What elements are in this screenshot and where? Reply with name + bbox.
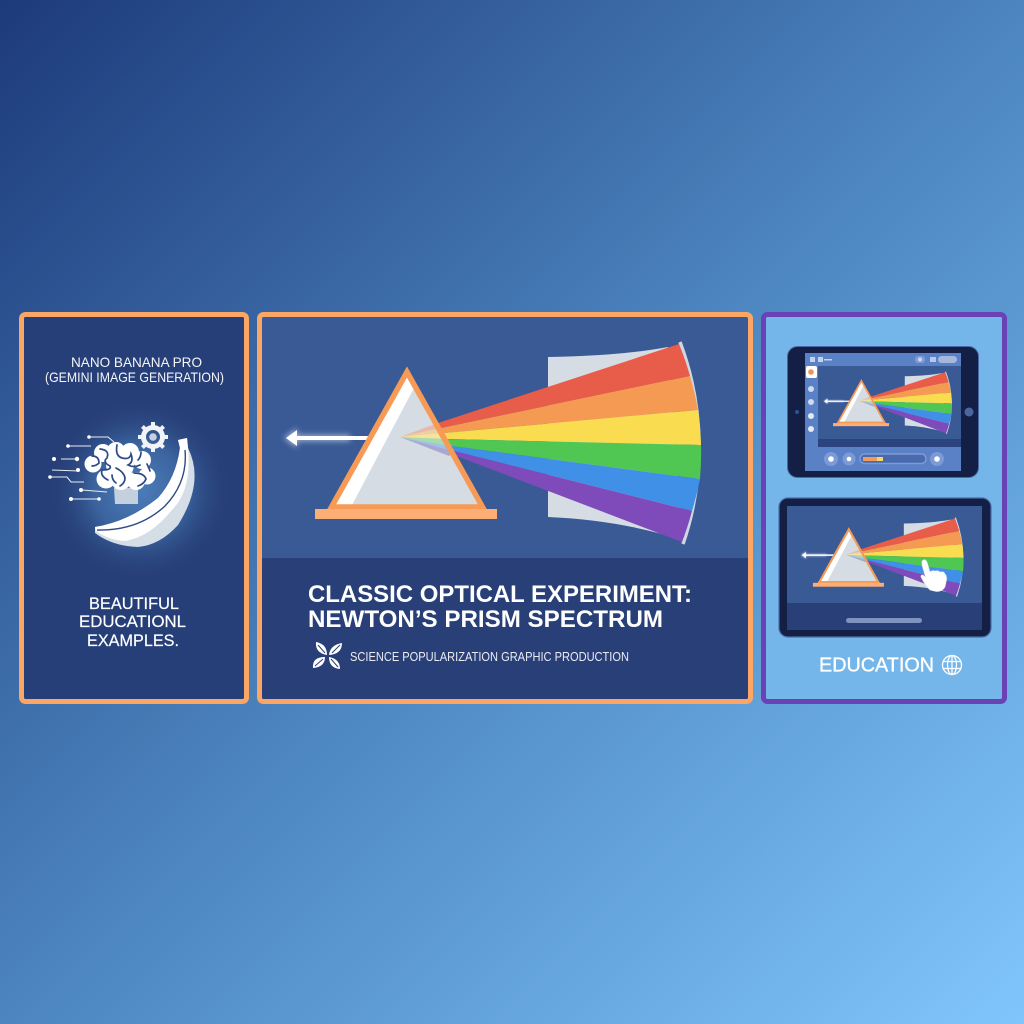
device: touch tablet — [779, 498, 991, 637]
home bar — [846, 618, 922, 623]
heading: Nano Banana Pro: NANO BANANA PRO — [71, 354, 202, 370]
panel: education — [764, 314, 1004, 702]
icon: gear — [138, 422, 168, 452]
title: NEWTON’S PRISM SPECTRUM — [308, 606, 663, 633]
mini prism diagram — [801, 518, 964, 596]
toolbar — [810, 356, 957, 363]
panel: Nano Banana Pro — [22, 314, 246, 702]
icon: globe — [942, 656, 962, 674]
text: beautiful educational examples: EDUCATIONL — [79, 612, 186, 631]
heading: Nano Banana Pro: (GEMINI IMAGE GENERATION) — [45, 369, 224, 385]
icon: pointing hand — [921, 560, 947, 592]
caption band — [262, 558, 748, 699]
heading: Nano Banana Pro — [45, 354, 224, 385]
device: tablet with controls — [788, 346, 978, 478]
panel: Newton's prism main — [260, 314, 750, 702]
diagram: prism and spectrum — [284, 342, 701, 544]
title: CLASSIC OPTICAL EXPERIMENT: — [308, 581, 692, 608]
mini prism diagram — [823, 372, 952, 434]
icon: brain — [84, 442, 156, 504]
text: beautiful educational examples: EXAMPLES. — [87, 631, 179, 650]
icon: banana — [95, 438, 195, 547]
icon: circuit traces — [48, 435, 114, 501]
text: beautiful educational examples: BEAUTIFUL — [89, 594, 179, 613]
playback controls — [824, 452, 944, 466]
icon glow — [48, 398, 232, 582]
icon: leaf logo — [313, 642, 342, 669]
title — [308, 581, 692, 633]
label: education: EDUCATION — [819, 654, 934, 676]
sidebar buttons — [806, 366, 817, 432]
subtitle: SCIENCE POPULARIZATION GRAPHIC PRODUCTION — [350, 650, 629, 664]
text: beautiful educational examples — [79, 594, 186, 650]
